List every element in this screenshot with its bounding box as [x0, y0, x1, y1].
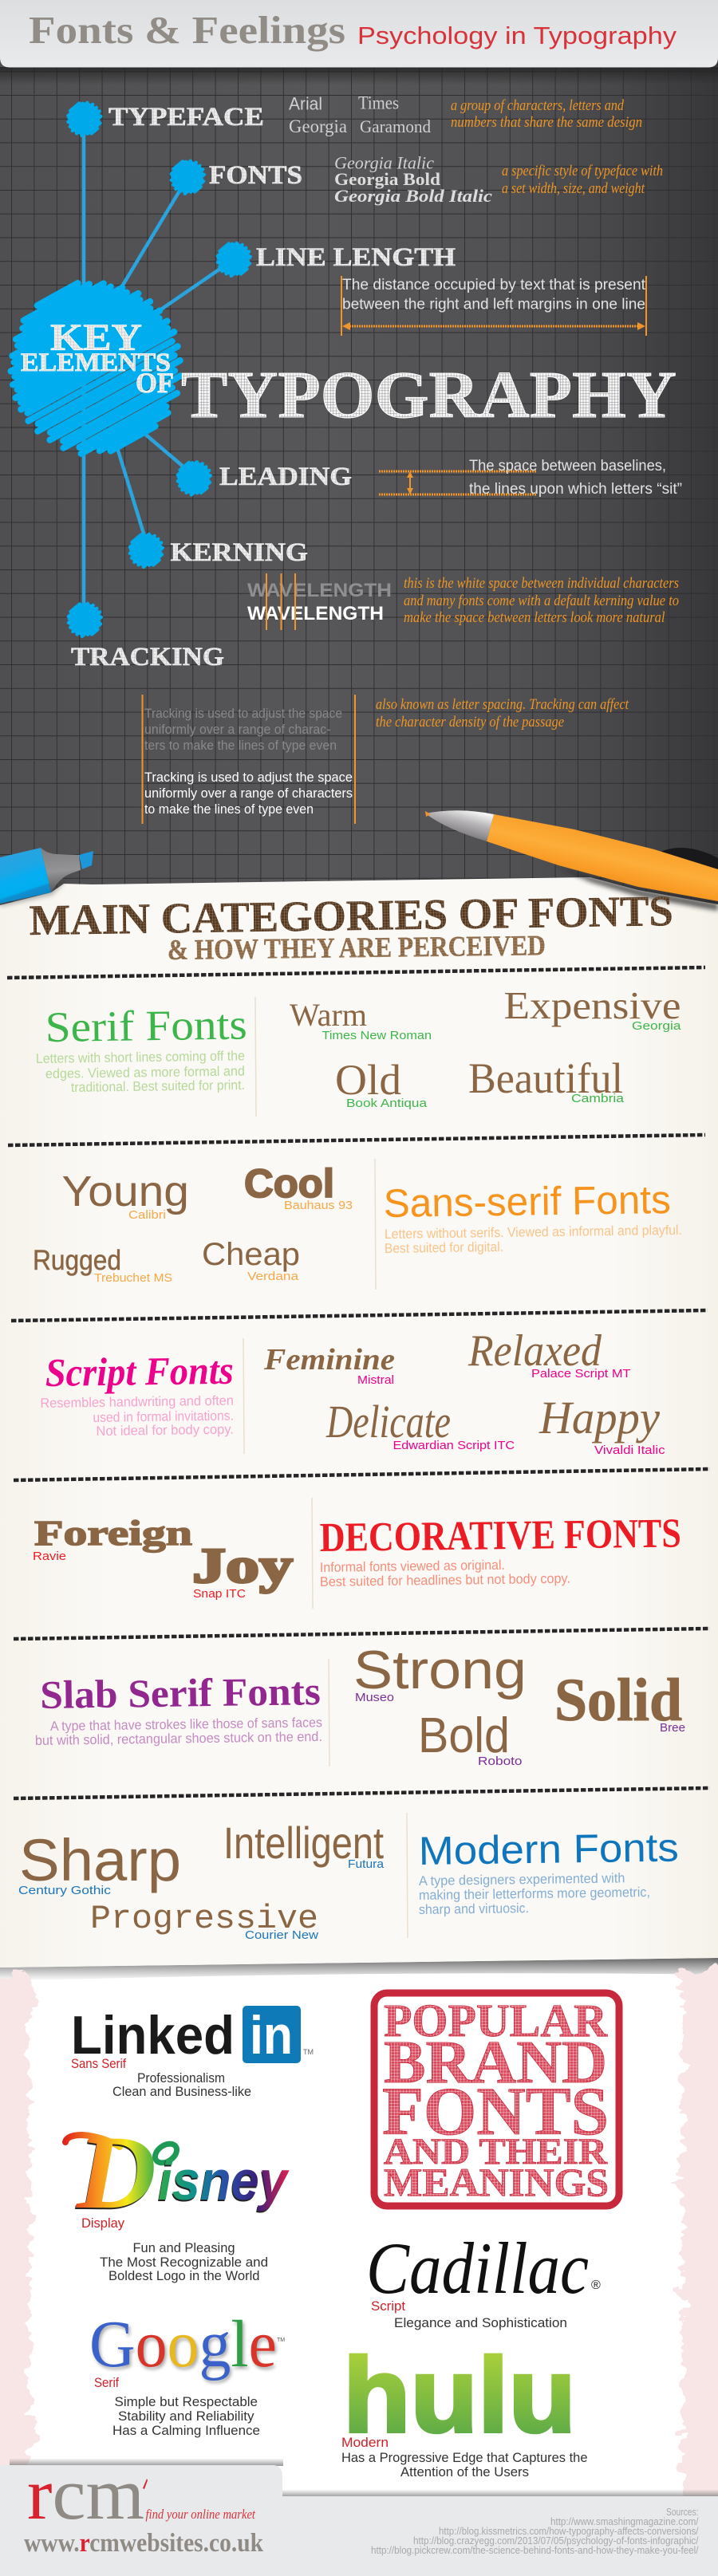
stamp: popular brand fonts and their meanings: MEANINGS [384, 2160, 609, 2204]
element: line length: The distance occupied by text that is present [342, 277, 646, 293]
category: decorative fonts [33, 1511, 681, 1601]
brand: google: Stability and Reliability [118, 2409, 254, 2424]
panel: cream paper sheet [0, 877, 718, 1981]
brand: cadillac: Elegance and Sophistication [394, 2315, 567, 2330]
brand: disney: The Most Recognizable and [100, 2255, 268, 2270]
category: modern fonts: making their letterforms more geometric, [419, 1885, 650, 1903]
footer panel [0, 2453, 718, 2576]
category: script fonts: Resembles handwriting and often [40, 1393, 234, 1411]
category: modern fonts: Courier New [245, 1928, 318, 1942]
category: serif fonts: Serif Fonts [45, 1000, 247, 1051]
category: modern fonts: Futura [348, 1857, 385, 1871]
element: tracking: Tracking is used to adjust the space [144, 706, 342, 721]
category: modern fonts [18, 1818, 679, 1942]
category: decorative fonts: Foreign [34, 1514, 192, 1553]
connector lines from hub to the six elements [84, 132, 220, 606]
panel: pink torn-edge borders of brand section [0, 1970, 718, 2511]
element: tracking: also known as letter spacing. Tracking can affect [376, 696, 629, 713]
element: line length: LINE LENGTH [256, 243, 456, 272]
brand: linkedin: TM [303, 2048, 314, 2056]
element: kerning: this is the white space between individual characters [404, 575, 679, 592]
sources: http://blog.pickcrew.com/the-science-behind-fonts-and-how-they-make-you-feel/ [371, 2545, 699, 2556]
element: typeface: a group of characters, letters and [451, 97, 624, 114]
brand: linkedin [71, 2005, 314, 2099]
subtitle: Psychology in Typography [357, 22, 677, 49]
element: kerning: WAVELENGTH [247, 603, 384, 624]
category: serif fonts [36, 983, 681, 1110]
category: script fonts: Relaxed [467, 1326, 602, 1376]
brand: google: TM [277, 2338, 285, 2343]
category: slab serif fonts: A type that have strokes like those of sans faces [50, 1715, 322, 1734]
brand: cadillac: ® [591, 2279, 601, 2292]
element: tracking: ters to make the lines of type even [144, 738, 337, 753]
category: sans-serif fonts: Young [62, 1168, 189, 1215]
category: script fonts: Edwardian Script ITC [393, 1439, 515, 1452]
brand: google [89, 2307, 285, 2438]
brand: disney: Boldest Logo in the World [108, 2268, 260, 2283]
category: modern fonts: Century Gothic [18, 1884, 112, 1897]
category: modern fonts: Progressive [90, 1900, 318, 1938]
category: slab serif fonts: Slab Serif Fonts [40, 1668, 321, 1717]
element: tracking: TRACKING [71, 643, 224, 672]
category: serif fonts: Old [335, 1056, 401, 1104]
header banner [0, 0, 718, 67]
element: fonts: FONTS [209, 161, 302, 190]
icon: orange pen [425, 810, 718, 911]
brand: hulu: Modern [341, 2435, 389, 2450]
element: typeface: Georgia [289, 116, 347, 136]
brand: disney: isney [158, 2149, 290, 2212]
category: slab serif fonts: Bold [418, 1708, 510, 1763]
category: sans-serif fonts: Bauhaus 93 [284, 1199, 353, 1212]
category: slab serif fonts: but with solid, rectangular shoes stuck on the end. [35, 1729, 322, 1748]
category: script fonts: Not ideal for body copy. [96, 1422, 234, 1439]
heading: TYPOGRAPHY: TYPOGRAPHY [181, 358, 677, 432]
category: sans-serif fonts: Best suited for digital. [385, 1239, 503, 1256]
category: script fonts: Script Fonts [45, 1348, 234, 1395]
brand: linkedin: Clean and Business-like [112, 2084, 251, 2099]
category: decorative fonts: Joy [192, 1539, 293, 1593]
category: decorative fonts: Best suited for headlines but not body copy. [320, 1571, 570, 1589]
category: serif fonts: Expensive [504, 983, 681, 1027]
element: leading: LEADING [219, 463, 352, 491]
element: kerning: KERNING [171, 538, 308, 567]
element: leading [172, 455, 682, 501]
sources [371, 2507, 699, 2556]
element: tracking: Tracking is used to adjust the space [144, 770, 353, 785]
category: script fonts: Happy [538, 1392, 660, 1444]
category: serif fonts: traditional. Best suited for print. [71, 1077, 245, 1095]
category: slab serif fonts: Solid [554, 1667, 682, 1734]
category: serif fonts: edges. Viewed as more formal and [45, 1064, 245, 1081]
stamp: popular brand fonts and their meanings: FONTS [382, 2073, 609, 2149]
sources: http://blog.crazyegg.com/2013/07/05/psychology-of-fonts-infographic/ [413, 2535, 699, 2546]
brand: cadillac: Script [371, 2298, 405, 2314]
category: serif fonts: Book Antiqua [346, 1097, 428, 1110]
hub: key elements of typography: OF [136, 367, 174, 399]
category: sans-serif fonts: Calibri [128, 1208, 166, 1222]
category: sans-serif fonts: Sans-serif Fonts [383, 1177, 671, 1226]
category: modern fonts: Modern Fonts [418, 1825, 679, 1873]
element: typeface: Garamond [360, 116, 431, 136]
brand: hulu: Has a Progressive Edge that Captures the [341, 2450, 587, 2465]
category: script fonts: Feminine [263, 1343, 395, 1377]
hub: key elements of typography [0, 254, 210, 479]
category: script fonts: used in formal invitations. [93, 1408, 234, 1425]
element: leading: the lines upon which letters “sit” [469, 481, 682, 498]
category: sans-serif fonts: Rugged [33, 1245, 121, 1276]
element: kerning [124, 528, 679, 630]
category: serif fonts: Georgia [632, 1019, 681, 1033]
hub: key elements of typography: ELEMENTS [21, 349, 171, 377]
category: serif fonts: Times New Roman [322, 1029, 432, 1042]
category: slab serif fonts: Museo [355, 1691, 394, 1704]
category: slab serif fonts: Strong [353, 1640, 527, 1700]
arrow: baseline gap [379, 471, 536, 494]
brand: hulu: Attention of the Users [400, 2464, 529, 2479]
sources: http://blog.kissmetrics.com/how-typography-affects-conversions/ [439, 2526, 699, 2537]
hub: key elements of typography: KEY [50, 317, 142, 359]
brand: linkedin: Linked [71, 2005, 235, 2066]
element: fonts: Georgia Italic [334, 153, 434, 172]
element: tracking: uniformly over a range of charac- [144, 722, 330, 737]
category: sans-serif fonts: Trebuchet MS [94, 1271, 172, 1285]
category: script fonts: Delicate [325, 1396, 451, 1448]
logo: rcm: find your online market [145, 2507, 256, 2522]
element: typeface: Arial [289, 94, 322, 113]
element: tracking: the character density of the passage [376, 714, 564, 731]
element: typeface: numbers that share the same design [451, 114, 642, 131]
brand: linkedin: in [250, 2005, 293, 2066]
brand: disney: D [76, 2113, 156, 2231]
element: tracking [62, 597, 629, 824]
stamp: popular brand fonts and their meanings [374, 1993, 619, 2206]
category: decorative fonts: Ravie [33, 1550, 66, 1563]
category: modern fonts: Intelligent [223, 1818, 384, 1868]
brand: disney: Display [81, 2216, 124, 2231]
brand: google: Simple but Respectable [115, 2394, 258, 2409]
brand: google: Serif [94, 2375, 119, 2390]
stamp: popular brand fonts and their meanings: POPULAR [384, 1995, 608, 2046]
element: typeface [61, 93, 642, 142]
sources: http://www.smashingmagazine.com/ [550, 2516, 699, 2527]
website address: www.rcmwebsites.co.uk [24, 2529, 264, 2558]
brand: disney [65, 2113, 290, 2283]
element: fonts: Georgia Bold [334, 169, 440, 189]
category: script fonts: Vivaldi Italic [594, 1444, 665, 1457]
heading: main categories of fonts: & HOW THEY ARE PERCEIVED [168, 929, 546, 966]
element: leading: The space between baselines, [469, 458, 666, 475]
heading: main categories of fonts: MAIN CATEGORIES OF FONTS [29, 887, 673, 944]
element: tracking: to make the lines of type even [144, 802, 314, 817]
arrow: line length measure [341, 276, 646, 336]
element: typeface: Times [358, 93, 399, 113]
category: script fonts: Mistral [357, 1373, 394, 1387]
brand: linkedin: Sans Serif [71, 2056, 126, 2071]
category: decorative fonts: Snap ITC [193, 1587, 246, 1601]
element: kerning: and many fonts come with a default kerning value to [404, 593, 679, 609]
category: serif fonts: Letters with short lines coming off the [36, 1048, 245, 1066]
element: fonts: a set width, size, and weight [502, 180, 645, 197]
category: slab serif fonts: Roboto [478, 1755, 522, 1768]
stamp: popular brand fonts and their meanings: AND THEIR [384, 2131, 608, 2172]
category: serif fonts: Warm [290, 997, 367, 1033]
category: serif fonts: Beautiful [468, 1054, 623, 1102]
category: serif fonts: Cambria [571, 1092, 625, 1105]
element: line length [211, 237, 646, 336]
category: sans-serif fonts [33, 1161, 682, 1285]
category: modern fonts: Sharp [19, 1827, 181, 1893]
category: decorative fonts: Informal fonts viewed as original. [320, 1558, 505, 1575]
element: fonts: Georgia Bold Italic [334, 186, 492, 206]
category: slab serif fonts [35, 1640, 685, 1768]
category: sans-serif fonts: Cool [244, 1161, 334, 1206]
category: modern fonts: sharp and virtuosic. [419, 1900, 529, 1917]
category: script fonts [40, 1326, 665, 1457]
element: line length: between the right and left margins in one line [342, 297, 645, 313]
stamp: popular brand fonts and their meanings: BRAND [384, 2029, 607, 2096]
element: fonts: a specific style of typeface with [502, 163, 663, 179]
category: sans-serif fonts: Letters without serifs. Viewed as informal and playful. [385, 1223, 682, 1242]
element: kerning: WAVELENGTH [247, 580, 392, 601]
category: sans-serif fonts: Verdana [247, 1270, 299, 1283]
element: tracking: uniformly over a range of characters [144, 786, 353, 801]
brand: hulu: hulu [343, 2337, 576, 2455]
logo: rcm: rcm [27, 2453, 144, 2535]
brand: google: Google [89, 2307, 277, 2381]
brand: cadillac: Cadillac [366, 2227, 589, 2309]
category: sans-serif fonts: Cheap [202, 1237, 300, 1272]
element: kerning: make the space between letters look more natural [404, 609, 665, 626]
element: typeface: TYPEFACE [108, 103, 264, 132]
element: fonts [165, 153, 663, 206]
brand: linkedin: Professionalism [137, 2070, 225, 2086]
icon: blue highlighter [0, 848, 93, 907]
logo: rcm [27, 2453, 256, 2535]
sources: Sources: [666, 2507, 699, 2518]
category: modern fonts: A type designers experimented with [419, 1870, 625, 1889]
panel: chalkboard background [0, 48, 718, 917]
category: slab serif fonts: Bree [660, 1721, 685, 1735]
category: script fonts: Palace Script MT [531, 1367, 630, 1381]
brand: google: Has a Calming Influence [112, 2423, 260, 2438]
title: Fonts & Feelings [29, 8, 345, 52]
brand: disney: Fun and Pleasing [132, 2240, 235, 2255]
